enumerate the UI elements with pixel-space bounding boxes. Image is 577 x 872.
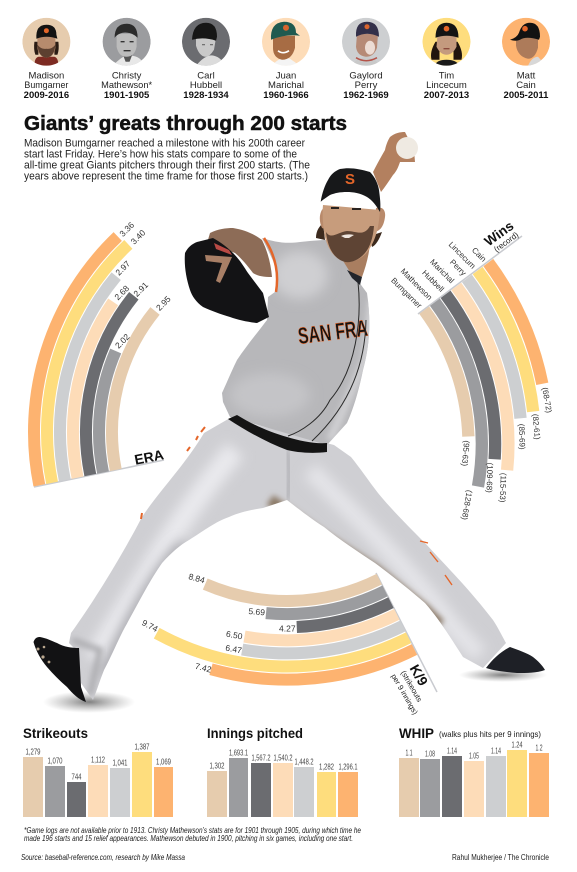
player names and years: Matt — [517, 70, 536, 82]
chart: Innings pitched: 1,693.1 — [229, 748, 248, 758]
Wins baseline — [418, 236, 522, 314]
player names and years: Tim — [439, 70, 454, 82]
K/9 labels: 4.27 — [279, 623, 296, 633]
ERA labels: 2.95 — [154, 294, 173, 313]
player names and years: 1928-1934 — [183, 90, 229, 101]
player names and years — [24, 70, 549, 101]
footnote: *Game logs are not available prior to 1913. Christy Mathewson’s stats are for 1901 through 1905, during which time he — [24, 826, 361, 835]
ERA labels: 2.68 — [112, 283, 131, 302]
player names and years: Hubbell — [190, 80, 222, 91]
pants shading — [72, 450, 480, 695]
Wins labels: Lincecum — [447, 240, 477, 271]
raised arm — [373, 132, 415, 192]
headshot: Gaylord Perry — [342, 18, 390, 66]
K/9 labels: K/9 — [407, 662, 431, 689]
sleeve trim — [264, 238, 277, 292]
Wins labels: Perry — [448, 258, 468, 278]
Wins labels: (128-68) — [460, 489, 474, 521]
chart: WHIP — [399, 726, 549, 817]
K/9 labels — [140, 571, 431, 717]
pants — [69, 418, 506, 700]
chart: WHIP: 1.05 — [469, 752, 479, 760]
ERA labels: 3.36 — [117, 220, 136, 239]
player names and years: 2007-2013 — [424, 90, 469, 101]
headshot: Christy Mathewson — [103, 18, 151, 66]
player names and years: Perry — [355, 80, 378, 91]
player names and years: Christy — [112, 70, 142, 82]
K/9 labels: per 9 innings) — [389, 672, 420, 717]
chart: Strikeouts: 1,069 — [156, 758, 171, 766]
chart: WHIP: 1.2 — [536, 744, 543, 752]
chart: Strikeouts: 1,041 — [112, 758, 128, 768]
photo: pitcher Madison Bumgarner — [34, 132, 547, 713]
chart: Innings pitched: 1,448.2 — [294, 758, 314, 766]
ERA labels: 3.40 — [129, 227, 148, 246]
ERA labels: 2.02 — [113, 331, 132, 350]
intro text: Madison Bumgarner reached a milestone with his 200th career — [24, 138, 305, 150]
intro text: years above represent the time frame for those first 200 starts.) — [24, 170, 308, 182]
ERA labels: ERA — [133, 446, 165, 468]
WHIP subtitle: (walks plus hits per 9 innings) — [439, 729, 541, 739]
heading: WHIP: WHIP — [399, 726, 434, 741]
neck — [340, 243, 370, 277]
left shoe — [34, 637, 86, 702]
jersey piping — [288, 282, 366, 441]
K/9 labels: 9.74 — [140, 617, 160, 634]
player names and years: Lincecum — [426, 80, 467, 91]
player names and years: Mathewson* — [101, 80, 152, 91]
K/9 baseline — [376, 573, 437, 692]
player names and years: Gaylord — [349, 70, 383, 82]
chart: WHIP: 1.1 — [406, 748, 413, 758]
headshot: Madison Bumgarner — [22, 18, 70, 66]
Wins labels: (115-53) — [498, 473, 508, 503]
source credit: Source: baseball-reference.com, research by Mike Massa — [21, 853, 185, 862]
Wins labels: (109-68) — [484, 462, 495, 493]
player names and years: 1962-1969 — [343, 90, 389, 101]
Wins labels: Bumgarner — [389, 276, 424, 310]
chart: Innings pitched: 1,282 — [319, 762, 334, 772]
chart: ERA arcs — [0, 114, 577, 750]
cap logo: S — [345, 171, 355, 188]
player names and years: Cain — [516, 80, 536, 91]
shoe shadows — [43, 668, 547, 713]
beard — [326, 226, 374, 262]
Wins labels: (record) — [492, 230, 521, 254]
Wins labels: Mathewson — [399, 267, 434, 302]
chart: Strikeouts: 1,070 — [48, 756, 63, 766]
chart: Innings pitched: 1,296.1 — [338, 762, 358, 772]
chart: WHIP: 1.08 — [425, 750, 435, 758]
Wins labels: Wins — [482, 218, 516, 249]
intro text — [24, 138, 310, 182]
chart: Innings pitched: 1,302 — [210, 762, 225, 770]
headshots row — [22, 18, 550, 66]
ERA baseline — [34, 460, 164, 487]
K/9 labels: 8.84 — [187, 571, 206, 585]
Wins labels: (82-61) — [531, 414, 542, 440]
chart: Innings pitched: 1,540.2 — [274, 754, 293, 762]
byline: Rahul Mukherjee / The Chronicle — [452, 853, 549, 862]
player names and years: Juan — [276, 70, 296, 82]
K/9 labels: 6.50 — [225, 629, 244, 641]
footnote — [24, 826, 361, 843]
ERA labels: 2.97 — [113, 258, 132, 277]
Wins labels: (85-69) — [517, 424, 527, 450]
jersey shading — [230, 251, 372, 440]
heading: Strikeouts: Strikeouts — [23, 726, 88, 741]
title: Giants’ greats through 200 starts — [24, 113, 347, 135]
headshot: Carl Hubbell — [182, 18, 230, 66]
Wins labels: Marichal — [428, 257, 456, 285]
Wins labels — [389, 218, 554, 521]
player names and years: 2009-2016 — [24, 90, 69, 101]
pants orange piping — [141, 427, 452, 585]
mouth — [341, 234, 354, 238]
belt — [228, 415, 327, 453]
glove hand — [205, 255, 232, 283]
K/9 labels: (strikeouts — [399, 669, 424, 704]
headshot: Matt Cain — [502, 18, 550, 66]
intro text: all-time great Giants pitchers through their first 200 starts. (The — [24, 160, 310, 172]
chart: WHIP: 1.24 — [512, 740, 523, 750]
collar — [347, 270, 362, 285]
right shoe — [486, 647, 545, 673]
glove — [185, 238, 269, 323]
player names and years: Marichal — [268, 80, 304, 91]
ears — [320, 207, 385, 232]
chart: Innings pitched — [207, 726, 358, 817]
Wins labels: (68-72) — [540, 387, 554, 414]
chart: WHIP: 1.14 — [491, 746, 501, 756]
jersey lettering: SAN FRA — [296, 315, 369, 349]
chart: Innings pitched: 1,567.2 — [252, 754, 271, 762]
player names and years: Bumgarner — [24, 80, 68, 91]
player names and years: 2005-2011 — [504, 90, 549, 101]
intro text: start last Friday. Here’s how his stats compare to some of the — [24, 148, 297, 160]
player names and years: 1960-1966 — [263, 90, 309, 101]
chart: Strikeouts: 1,279 — [26, 748, 41, 756]
face — [323, 205, 380, 262]
ERA labels — [112, 220, 173, 468]
ERA labels: 2.91 — [131, 280, 150, 299]
Wins labels: (95-63) — [460, 440, 471, 467]
K/9 labels: 6.47 — [225, 643, 243, 655]
footnote: made 196 starts and 15 relief appearances. Mathewson debuted in 1900, pitching in six games, including one start. — [24, 834, 353, 843]
shoe cleats — [36, 646, 50, 663]
Wins labels: Cain — [470, 246, 488, 264]
baseball — [396, 137, 418, 159]
player names and years: Carl — [197, 70, 215, 82]
chart: WHIP: 1.14 — [447, 746, 457, 756]
glove webbing label — [214, 243, 232, 255]
jersey — [222, 238, 369, 445]
cap — [321, 168, 380, 212]
headshot: Juan Marichal — [262, 18, 310, 66]
chart: Strikeouts: 1,112 — [91, 756, 105, 764]
heading: Innings pitched: Innings pitched — [207, 726, 303, 741]
headshot: Tim Lincecum — [422, 18, 470, 66]
back hair — [316, 223, 382, 247]
player names and years: 1901-1905 — [104, 90, 150, 101]
glove arm — [205, 228, 272, 277]
Wins labels: Hubbell — [420, 268, 446, 294]
chart: Strikeouts: 744 — [72, 772, 82, 782]
K/9 labels: 7.42 — [194, 661, 213, 675]
K/9 labels: 5.69 — [248, 606, 266, 617]
chart: Strikeouts — [23, 726, 173, 817]
player names and years: Madison — [28, 70, 64, 82]
eyes — [331, 208, 361, 209]
chart: Strikeouts: 1,387 — [134, 742, 150, 752]
